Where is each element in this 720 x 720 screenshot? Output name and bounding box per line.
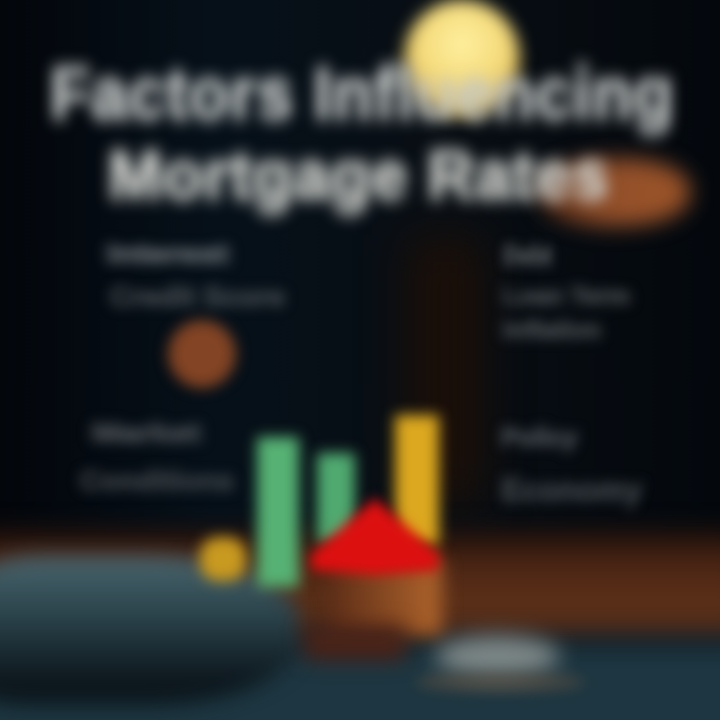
bar chart <box>190 404 450 596</box>
small yellow bar <box>200 537 246 581</box>
top right body: Inflation <box>503 317 601 344</box>
top right body: Loan Term <box>503 283 630 310</box>
table surface <box>0 530 720 640</box>
green bar 1 <box>257 437 299 587</box>
title <box>42 52 681 227</box>
text block: top left <box>100 238 289 312</box>
background glow <box>0 0 720 540</box>
text block: lower right <box>496 422 645 511</box>
green bar 2 <box>317 453 355 543</box>
lower right heading: Policy <box>501 422 578 452</box>
foam rim <box>415 672 585 692</box>
red roof <box>302 491 448 582</box>
lower left body: Conditions <box>80 465 234 496</box>
lower right body: Economy <box>501 472 642 508</box>
top left heading: Interest <box>107 238 228 269</box>
house <box>297 491 454 668</box>
icon: orange circle <box>168 320 236 388</box>
house body <box>330 560 442 635</box>
house reflection <box>305 625 405 660</box>
title line 1: Factors Influencing <box>50 52 674 135</box>
orange glow on title <box>540 158 690 226</box>
grey stone left <box>0 555 300 705</box>
text block: top right <box>498 240 634 344</box>
water foreground <box>0 640 720 720</box>
dark brown center haze <box>405 235 485 505</box>
sun <box>404 0 520 116</box>
white foam <box>435 635 560 677</box>
top left body: Credit Score <box>110 281 285 312</box>
top right heading: Debt <box>503 240 552 270</box>
lower left heading: Market <box>92 417 200 448</box>
text block: lower left <box>76 417 237 496</box>
top right body <box>498 282 634 344</box>
yellow bar <box>395 415 439 545</box>
title line 2: Mortgage Rates <box>108 136 609 214</box>
